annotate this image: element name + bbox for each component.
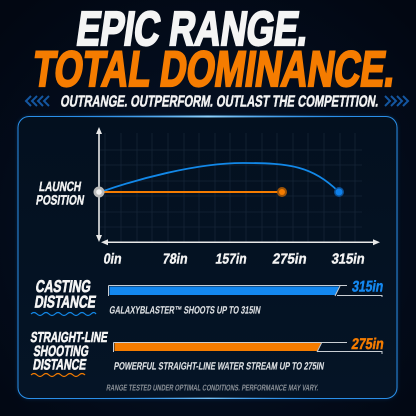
launch position label: LAUNCH <box>38 179 82 194</box>
straight-line label: STRAIGHT-LINE <box>29 330 109 346</box>
orange bar <box>114 342 382 354</box>
y axis <box>96 127 102 242</box>
blue end point <box>334 187 344 197</box>
x axis labels: 157in <box>214 252 248 267</box>
casting label: DISTANCE <box>33 293 97 311</box>
casting label <box>33 277 97 311</box>
casting label: CASTING <box>34 277 92 296</box>
heading: epic range: EPIC RANGE. <box>73 2 312 56</box>
straight-line description: POWERFUL STRAIGHT-LINE WATER STREAM UP TO 275IN <box>113 361 325 372</box>
blue wave underline <box>31 312 96 316</box>
trajectory chart <box>35 127 380 267</box>
x axis labels <box>102 252 366 267</box>
icon: left chevrons <box>26 96 49 106</box>
icon: right chevrons <box>385 96 408 106</box>
value 275in: 275in <box>350 336 385 353</box>
launch point <box>94 186 104 198</box>
casting distance section <box>31 277 385 316</box>
blue bar <box>108 286 382 297</box>
launch position label: POSITION <box>35 193 85 207</box>
title <box>29 2 399 97</box>
x axis <box>101 239 380 245</box>
casting description: GALAXYBLASTER™ SHOOTS UP TO 315IN <box>109 305 261 316</box>
orange wave underline <box>31 374 85 376</box>
orange straight trajectory <box>102 191 282 193</box>
value 315in: 315in <box>351 279 385 295</box>
launch position label <box>35 179 85 207</box>
straight-line distance section <box>29 330 385 376</box>
x axis labels: 275in <box>271 252 308 267</box>
panel: range chart <box>18 116 397 399</box>
straight-line label <box>29 330 109 373</box>
orange end point <box>277 187 287 197</box>
straight-line label: DISTANCE <box>32 357 88 373</box>
x axis labels: 0in <box>102 252 123 267</box>
x axis labels: 78in <box>161 252 189 267</box>
straight-line label: SHOOTING <box>32 343 90 360</box>
disclaimer: RANGE TESTED UNDER OPTIMAL CONDITIONS. PERFORMANCE MAY VARY. <box>106 383 319 392</box>
blue arc trajectory <box>102 163 339 192</box>
x axis labels: 315in <box>330 252 366 267</box>
